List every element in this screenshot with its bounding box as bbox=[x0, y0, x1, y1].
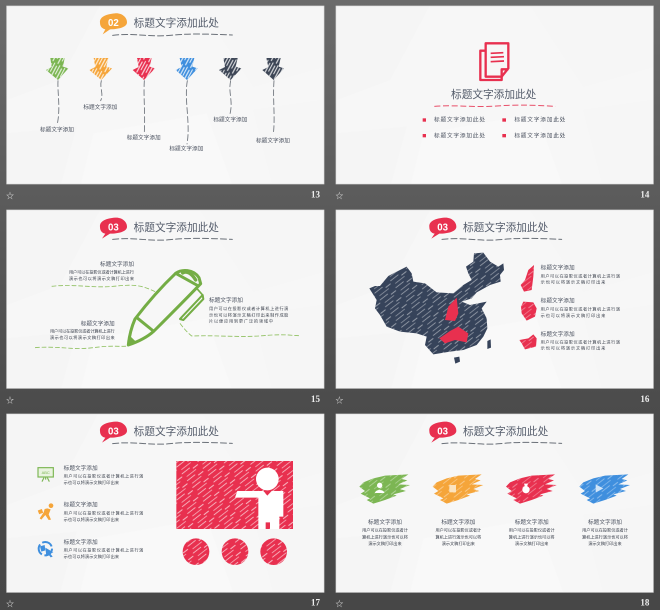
text block: right callout: 用户可以在投影仪或者计算机上进行演 bbox=[209, 305, 288, 311]
icon: red documents bbox=[480, 43, 508, 80]
text block: column 1: 算机上进行演示也可以将 bbox=[362, 533, 408, 539]
footer: star and page number bbox=[335, 394, 650, 405]
text block: province 2: 示也可以将演示文稿打印出来 bbox=[541, 312, 606, 318]
text block: column 4: 算机上进行演示也可以将 bbox=[582, 533, 628, 539]
text block: column 1 bbox=[362, 518, 408, 546]
panel: slide 16 map bbox=[335, 210, 653, 405]
panel: slide 18 brushes bbox=[335, 414, 653, 609]
icon: green arrow with label: 标题文字添加 bbox=[40, 126, 74, 134]
text block: right callout: 标题文字添加 bbox=[209, 296, 243, 304]
footer: star and page number: ☆ bbox=[335, 192, 343, 201]
text block: column 2: 用户可以在投影仪或者计 bbox=[435, 527, 481, 533]
list: four bullet items: 标题文字添加此处 bbox=[514, 116, 566, 124]
text block: column 3 bbox=[509, 518, 555, 546]
text block: right callout bbox=[209, 296, 288, 324]
icon: red scribble circle 2 bbox=[222, 538, 248, 565]
text block: right callout: 片以便应用到更广泛的领域中 bbox=[209, 318, 273, 324]
text block: column 2: 算机上进行演示也可以将 bbox=[435, 533, 481, 539]
footer: star and page number bbox=[335, 190, 650, 201]
text block: lower left callout: 用户可以在投影仪或者计算机上进行 bbox=[50, 327, 115, 333]
heading: slide 18 badge and title: 标题文字添加此处 bbox=[463, 425, 549, 438]
heading: slide 13 badge and title bbox=[100, 13, 232, 36]
text block: column 2 bbox=[435, 518, 481, 546]
text block: column 2: 标题文字添加 bbox=[441, 518, 476, 526]
panel: slide 13 arrows bbox=[6, 6, 324, 201]
text block: province 1 bbox=[541, 263, 620, 285]
text block: item 3: 示也可以将演示文稿打印出来 bbox=[64, 553, 120, 559]
heading: slide 16 badge and title bbox=[429, 218, 562, 240]
text block: item 2: 示也可以将演示文稿打印出来 bbox=[64, 516, 120, 522]
text block: item 2 bbox=[64, 501, 143, 522]
connector: green dashed leaders bbox=[35, 285, 300, 349]
icon: blue brush with play symbol bbox=[579, 474, 630, 504]
footer: star and page number: 17 bbox=[311, 597, 321, 607]
text block: item 1 bbox=[64, 464, 143, 485]
text block: column 4: 标题文字添加 bbox=[588, 518, 622, 526]
text block: province 3: 示也可以将演示文稿打印出来 bbox=[541, 345, 606, 351]
list: four bullet items: 标题文字添加此处 bbox=[434, 131, 485, 139]
icon: orange arrow with label bbox=[83, 58, 118, 111]
icon: orange brush with chart bbox=[433, 474, 483, 504]
text block: lower left callout bbox=[50, 319, 115, 340]
text block: province 3 bbox=[541, 330, 620, 351]
heading: slide 15 badge and title: 标题文字添加此处 bbox=[134, 221, 219, 234]
text block: column 3: 演示文稿打印出来 bbox=[515, 540, 549, 546]
icon: green presentation board: ABC bbox=[42, 470, 50, 475]
icon: green presentation board bbox=[38, 468, 53, 482]
panel: slide 14 contents bbox=[335, 6, 653, 201]
text block: column 4: 用户可以在投影仪或者计 bbox=[582, 527, 628, 533]
icon: dark arrow with label: 标题文字添加 bbox=[213, 116, 248, 124]
text block: column 4: 演示文稿打印出来 bbox=[588, 540, 622, 546]
text block: column 2: 演示文稿打印出来 bbox=[442, 540, 476, 546]
text block: province 1: 用户可以在投影仪或者计算机上进行演 bbox=[541, 272, 620, 278]
icon: dark arrow with long label: 标题文字添加 bbox=[256, 136, 290, 144]
heading: slide 15 badge and title bbox=[100, 218, 232, 240]
footer: star and page number: 15 bbox=[311, 394, 321, 404]
text block: province 1: 示也可以将演示文稿打印出来 bbox=[541, 279, 606, 285]
text block: province 1: 标题文字添加 bbox=[541, 263, 575, 271]
text block: item 3 bbox=[64, 538, 143, 559]
panel: slide 15 pen bbox=[6, 210, 324, 405]
footer: star and page number: ☆ bbox=[6, 192, 14, 201]
text block: upper left callout: 用户可以在投影仪或者计算机上进行 bbox=[69, 268, 134, 274]
text block: province 2: 用户可以在投影仪或者计算机上进行演 bbox=[541, 306, 620, 312]
panel: slide 17 presenter bbox=[6, 414, 324, 609]
text block: right callout: 示也可以将演示文稿打印出来制作成胶 bbox=[209, 311, 288, 317]
icon: province 2 bbox=[521, 302, 537, 321]
text block: upper left callout bbox=[69, 260, 135, 281]
chart: red scribble presenter image bbox=[176, 461, 293, 529]
text block: column 1: 标题文字添加 bbox=[368, 518, 402, 526]
icon: province 1 bbox=[521, 265, 534, 292]
text block: province 2: 标题文字添加 bbox=[541, 297, 575, 305]
heading: slide 18 badge and title: 03 bbox=[437, 426, 449, 437]
text block: item 2: 用户可以在投影仪或者计算机上进行演 bbox=[64, 509, 143, 515]
footer: star and page number bbox=[6, 597, 321, 609]
text block: column 3: 用户可以在投影仪或者计 bbox=[509, 527, 555, 533]
icon: red arrow with label bbox=[127, 58, 161, 141]
icon: red arrow with label: 标题文字添加 bbox=[127, 133, 161, 141]
text block: item 1: 标题文字添加 bbox=[64, 464, 98, 472]
icon: blue arrow with label bbox=[169, 58, 204, 153]
heading: slide 14 title: 标题文字添加此处 bbox=[451, 88, 537, 101]
text block: item 2: 标题文字添加 bbox=[64, 501, 98, 509]
heading: slide 15 badge and title: 03 bbox=[108, 222, 119, 233]
text block: column 4 bbox=[582, 518, 628, 546]
text block: lower left callout: 标题文字添加 bbox=[81, 319, 115, 327]
text block: column 3: 算机上进行演示也可以将 bbox=[509, 533, 555, 539]
heading: slide 18 badge and title bbox=[429, 422, 562, 444]
footer: star and page number: 13 bbox=[311, 190, 321, 200]
footer: star and page number: 14 bbox=[640, 190, 650, 200]
text block: province 2 bbox=[541, 297, 620, 318]
text block: item 3: 用户可以在投影仪或者计算机上进行演 bbox=[64, 546, 143, 552]
text block: lower left callout: 演示也可以将演示文稿打印出来 bbox=[50, 334, 115, 340]
icon: red scribble circle 1 bbox=[183, 538, 209, 565]
text block: upper left callout: 演示也可以将演示文稿打印出来 bbox=[69, 275, 135, 281]
icon: blue arrow with label: 标题文字添加 bbox=[169, 145, 204, 153]
icon: red brush with money bag bbox=[506, 474, 557, 504]
text block: column 1: 演示文稿打印出来 bbox=[368, 540, 402, 546]
icon: green brush with person bbox=[359, 474, 410, 504]
icon: dark arrow with label bbox=[213, 58, 248, 124]
icon: green pen bbox=[128, 270, 203, 346]
icon: blue globe cursor bbox=[39, 542, 53, 557]
text block: column 1: 用户可以在投影仪或者计 bbox=[362, 527, 408, 533]
footer: star and page number: 18 bbox=[640, 597, 650, 607]
heading: slide 17 badge and title: 标题文字添加此处 bbox=[134, 425, 219, 438]
heading: slide 14 title bbox=[434, 88, 556, 107]
map: China scribble bbox=[369, 253, 504, 364]
text block: item 3: 标题文字添加 bbox=[64, 538, 98, 546]
text block: upper left callout: 标题文字添加 bbox=[100, 260, 134, 268]
text block: item 1: 示也可以将演示文稿打印出来 bbox=[64, 479, 120, 485]
icon: orange arrow with label: 标题文字添加 bbox=[83, 103, 118, 111]
footer: star and page number: ☆ bbox=[335, 396, 343, 405]
footer: star and page number bbox=[6, 394, 321, 405]
heading: slide 13 badge and title: 02 bbox=[108, 18, 119, 29]
icon: dark arrow with long label bbox=[256, 58, 290, 144]
text block: item 1: 用户可以在投影仪或者计算机上进行演 bbox=[64, 472, 143, 478]
footer: star and page number: ☆ bbox=[6, 396, 14, 405]
footer: star and page number bbox=[6, 190, 321, 201]
footer: star and page number: ☆ bbox=[335, 600, 343, 609]
text block: province 3: 标题文字添加 bbox=[541, 330, 575, 338]
heading: slide 16 badge and title: 03 bbox=[437, 222, 449, 233]
icon: orange runner bbox=[38, 503, 53, 520]
list: four bullet items bbox=[423, 116, 566, 139]
text block: province 3: 用户可以在投影仪或者计算机上进行演 bbox=[541, 338, 620, 344]
icon: red scribble circle 3 bbox=[260, 538, 287, 565]
footer: star and page number: ☆ bbox=[6, 600, 14, 609]
heading: slide 16 badge and title: 标题文字添加此处 bbox=[463, 221, 549, 234]
heading: slide 13 badge and title: 标题文字添加此处 bbox=[134, 17, 219, 30]
icon: province 3 bbox=[519, 334, 537, 349]
heading: slide 17 badge and title bbox=[100, 422, 232, 444]
footer: star and page number bbox=[335, 597, 650, 609]
list: four bullet items: 标题文字添加此处 bbox=[514, 131, 566, 139]
text block: column 3: 标题文字添加 bbox=[515, 518, 549, 526]
heading: slide 17 badge and title: 03 bbox=[108, 426, 119, 437]
list: four bullet items: 标题文字添加此处 bbox=[434, 116, 485, 124]
icon: green arrow with label bbox=[40, 58, 74, 134]
footer: star and page number: 16 bbox=[640, 394, 650, 404]
